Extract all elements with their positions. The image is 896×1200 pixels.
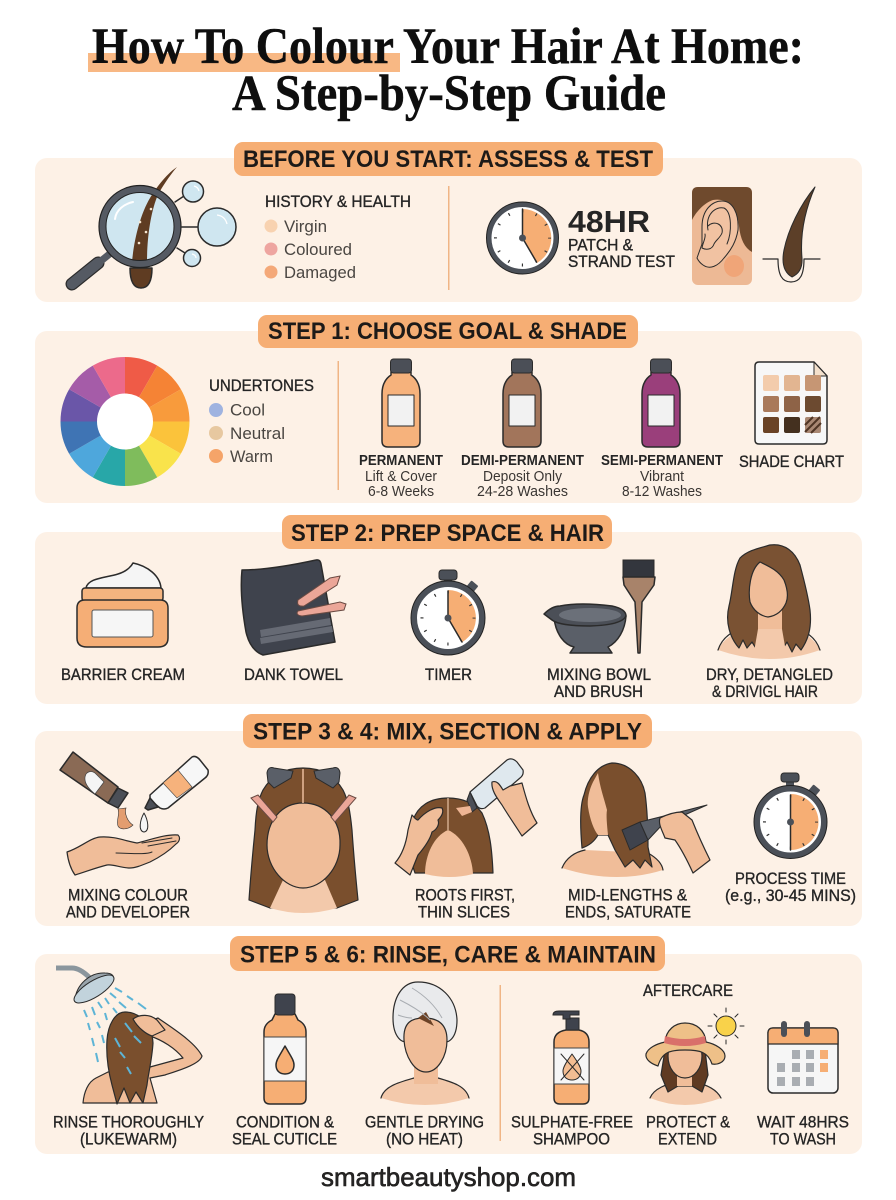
label: demi-permanent: Deposit Only — [483, 468, 562, 485]
icon: ear patch test — [692, 187, 752, 285]
label: semi-permanent: 8-12 Washes — [622, 483, 702, 500]
icon: conditioner bottle — [264, 994, 306, 1104]
label: wait 48hrs: TO WASH — [770, 1130, 836, 1148]
label: rinse thoroughly: RINSE THOROUGHLY — [53, 1114, 204, 1132]
label: sulphate-free shampoo: SULPHATE-FREE — [511, 1114, 633, 1132]
label: gentle drying — [365, 1114, 484, 1148]
label: permanent: Lift & Cover — [365, 468, 437, 485]
icon: mixing bowl and brush — [544, 560, 655, 653]
label: wait 48hrs — [757, 1114, 849, 1148]
legend: undertones — [209, 377, 314, 466]
label: permanent: PERMANENT — [359, 452, 443, 469]
label: permanent — [359, 452, 443, 500]
label: condition: CONDITION & — [236, 1114, 334, 1132]
label: hair condition: & DRIVIGL HAIR — [712, 683, 818, 701]
label: semi-permanent: Vibrant — [640, 468, 685, 485]
panel: before you start — [35, 142, 862, 302]
icon: applying to roots — [395, 759, 537, 877]
legend: undertones: Cool — [230, 400, 265, 420]
icon: sun hat protection — [646, 1008, 744, 1105]
label: permanent: 6-8 Weeks — [368, 483, 434, 500]
label: mid-lengths: MID-LENGTHS & — [568, 886, 687, 904]
icon: hair follicle — [763, 187, 820, 282]
label: sulphate-free shampoo — [511, 1114, 633, 1148]
icon: towel-wrapped head — [381, 982, 469, 1105]
icon: semi-permanent bottle — [642, 359, 680, 447]
label: process time: PROCESS TIME — [735, 870, 846, 888]
icon: stopwatch — [754, 773, 827, 858]
icon: clock — [486, 202, 558, 274]
label: protect and extend — [646, 1114, 730, 1148]
text: 48hr patch and strand test: PATCH & — [568, 236, 633, 254]
label: process time: (e.g., 30-45 MINS) — [725, 887, 856, 905]
label: rinse thoroughly: (LUKEWARM) — [80, 1130, 177, 1148]
icon: demi-permanent bottle — [503, 359, 541, 447]
label: protect and extend: PROTECT & — [646, 1114, 730, 1132]
label: gentle drying: GENTLE DRYING — [365, 1114, 484, 1132]
label: wait 48hrs: WAIT 48HRS — [757, 1114, 849, 1132]
label: mixing colour and developer: AND DEVELOPER — [66, 904, 190, 922]
panel: step 2 — [35, 515, 862, 704]
legend: history and health — [264, 193, 411, 282]
heading: step 5 and 6: STEP 5 & 6: RINSE, CARE & MAINTAIN — [240, 942, 656, 968]
panel: step 1 — [35, 315, 862, 503]
legend: history and health: Coloured — [284, 240, 352, 259]
label: roots first: THIN SLICES — [418, 904, 510, 922]
label: semi-permanent — [601, 452, 723, 500]
label: rinse thoroughly — [53, 1114, 204, 1148]
label: dank towel: DANK TOWEL — [244, 666, 343, 684]
label: demi-permanent: 24-28 Washes — [477, 483, 568, 500]
label: gentle drying: (NO HEAT) — [386, 1130, 463, 1148]
label: hair condition: DRY, DETANGLED — [706, 666, 833, 684]
label: semi-permanent: SEMI-PERMANENT — [601, 452, 723, 469]
label: sulphate-free shampoo: SHAMPOO — [533, 1130, 610, 1148]
label: condition — [232, 1114, 337, 1148]
footer: website: smartbeautyshop.com — [321, 1162, 576, 1192]
label: demi-permanent — [461, 452, 584, 500]
label: roots first: ROOTS FIRST, — [415, 886, 515, 904]
heading: step 1: STEP 1: CHOOSE GOAL & SHADE — [268, 318, 627, 345]
text: 48hr patch and strand test: STRAND TEST — [568, 253, 675, 271]
label: demi-permanent: DEMI-PERMANENT — [461, 452, 584, 469]
title — [88, 19, 804, 122]
icon: shade chart — [755, 362, 827, 444]
legend: undertones: UNDERTONES — [209, 377, 314, 395]
label: mixing bowl and brush — [547, 666, 651, 701]
icon: sectioned hair with clips — [249, 768, 358, 913]
icon: mid-lengths application — [562, 763, 710, 877]
title: How To Colour Your Hair At Home: — [92, 19, 804, 75]
heading: step 3 and 4: STEP 3 & 4: MIX, SECTION & APPLY — [253, 718, 642, 746]
panel: step 5 and 6 — [35, 936, 862, 1154]
chart: colour wheel — [60, 357, 190, 486]
label: mixing colour and developer: MIXING COLOUR — [68, 886, 188, 904]
text: 48hr patch and strand test: 48HR — [568, 204, 650, 239]
label: condition: SEAL CUTICLE — [232, 1130, 337, 1148]
icon: rinsing in shower — [56, 968, 202, 1104]
icon: barrier cream — [77, 563, 168, 647]
icon: permanent bottle — [382, 359, 420, 447]
label: timer: TIMER — [425, 666, 472, 684]
legend: history and health: Virgin — [284, 217, 327, 236]
label: hair condition — [706, 666, 833, 701]
legend: history and health: Damaged — [284, 263, 356, 282]
label: protect and extend: EXTEND — [658, 1130, 717, 1148]
label: shade chart: SHADE CHART — [739, 453, 844, 471]
heading: step 2: STEP 2: PREP SPACE & HAIR — [291, 520, 604, 547]
icon: calendar — [768, 1021, 838, 1093]
label: barrier cream: BARRIER CREAM — [61, 666, 185, 684]
label: mid-lengths: ENDS, SATURATE — [565, 904, 691, 922]
label: roots first — [415, 886, 515, 922]
icon: dank towel with clips — [241, 560, 346, 655]
panel: step 3 and 4 — [35, 714, 862, 926]
label: mixing bowl and brush: MIXING BOWL — [547, 666, 651, 684]
label: mixing bowl and brush: AND BRUSH — [554, 683, 643, 701]
legend: undertones: Warm — [230, 447, 273, 466]
icon: mixing colour and developer — [60, 752, 208, 875]
icon: sulphate-free shampoo — [553, 1011, 589, 1104]
legend: history and health: HISTORY & HEALTH — [265, 193, 411, 211]
label: mid-lengths — [565, 886, 691, 922]
legend: undertones: Neutral — [230, 424, 285, 443]
heading: aftercare: AFTERCARE — [643, 982, 733, 1000]
title: A Step-by-Step Guide — [232, 66, 666, 122]
label: process time — [725, 870, 856, 905]
text: 48hr patch and strand test — [568, 204, 675, 271]
heading: before you start: BEFORE YOU START: ASSESS & TEST — [243, 146, 653, 173]
icon: woman with long wavy hair — [718, 545, 820, 659]
icon: magnifier over hair strand — [72, 167, 236, 288]
label: mixing colour and developer — [66, 886, 190, 922]
icon: timer — [411, 570, 485, 655]
